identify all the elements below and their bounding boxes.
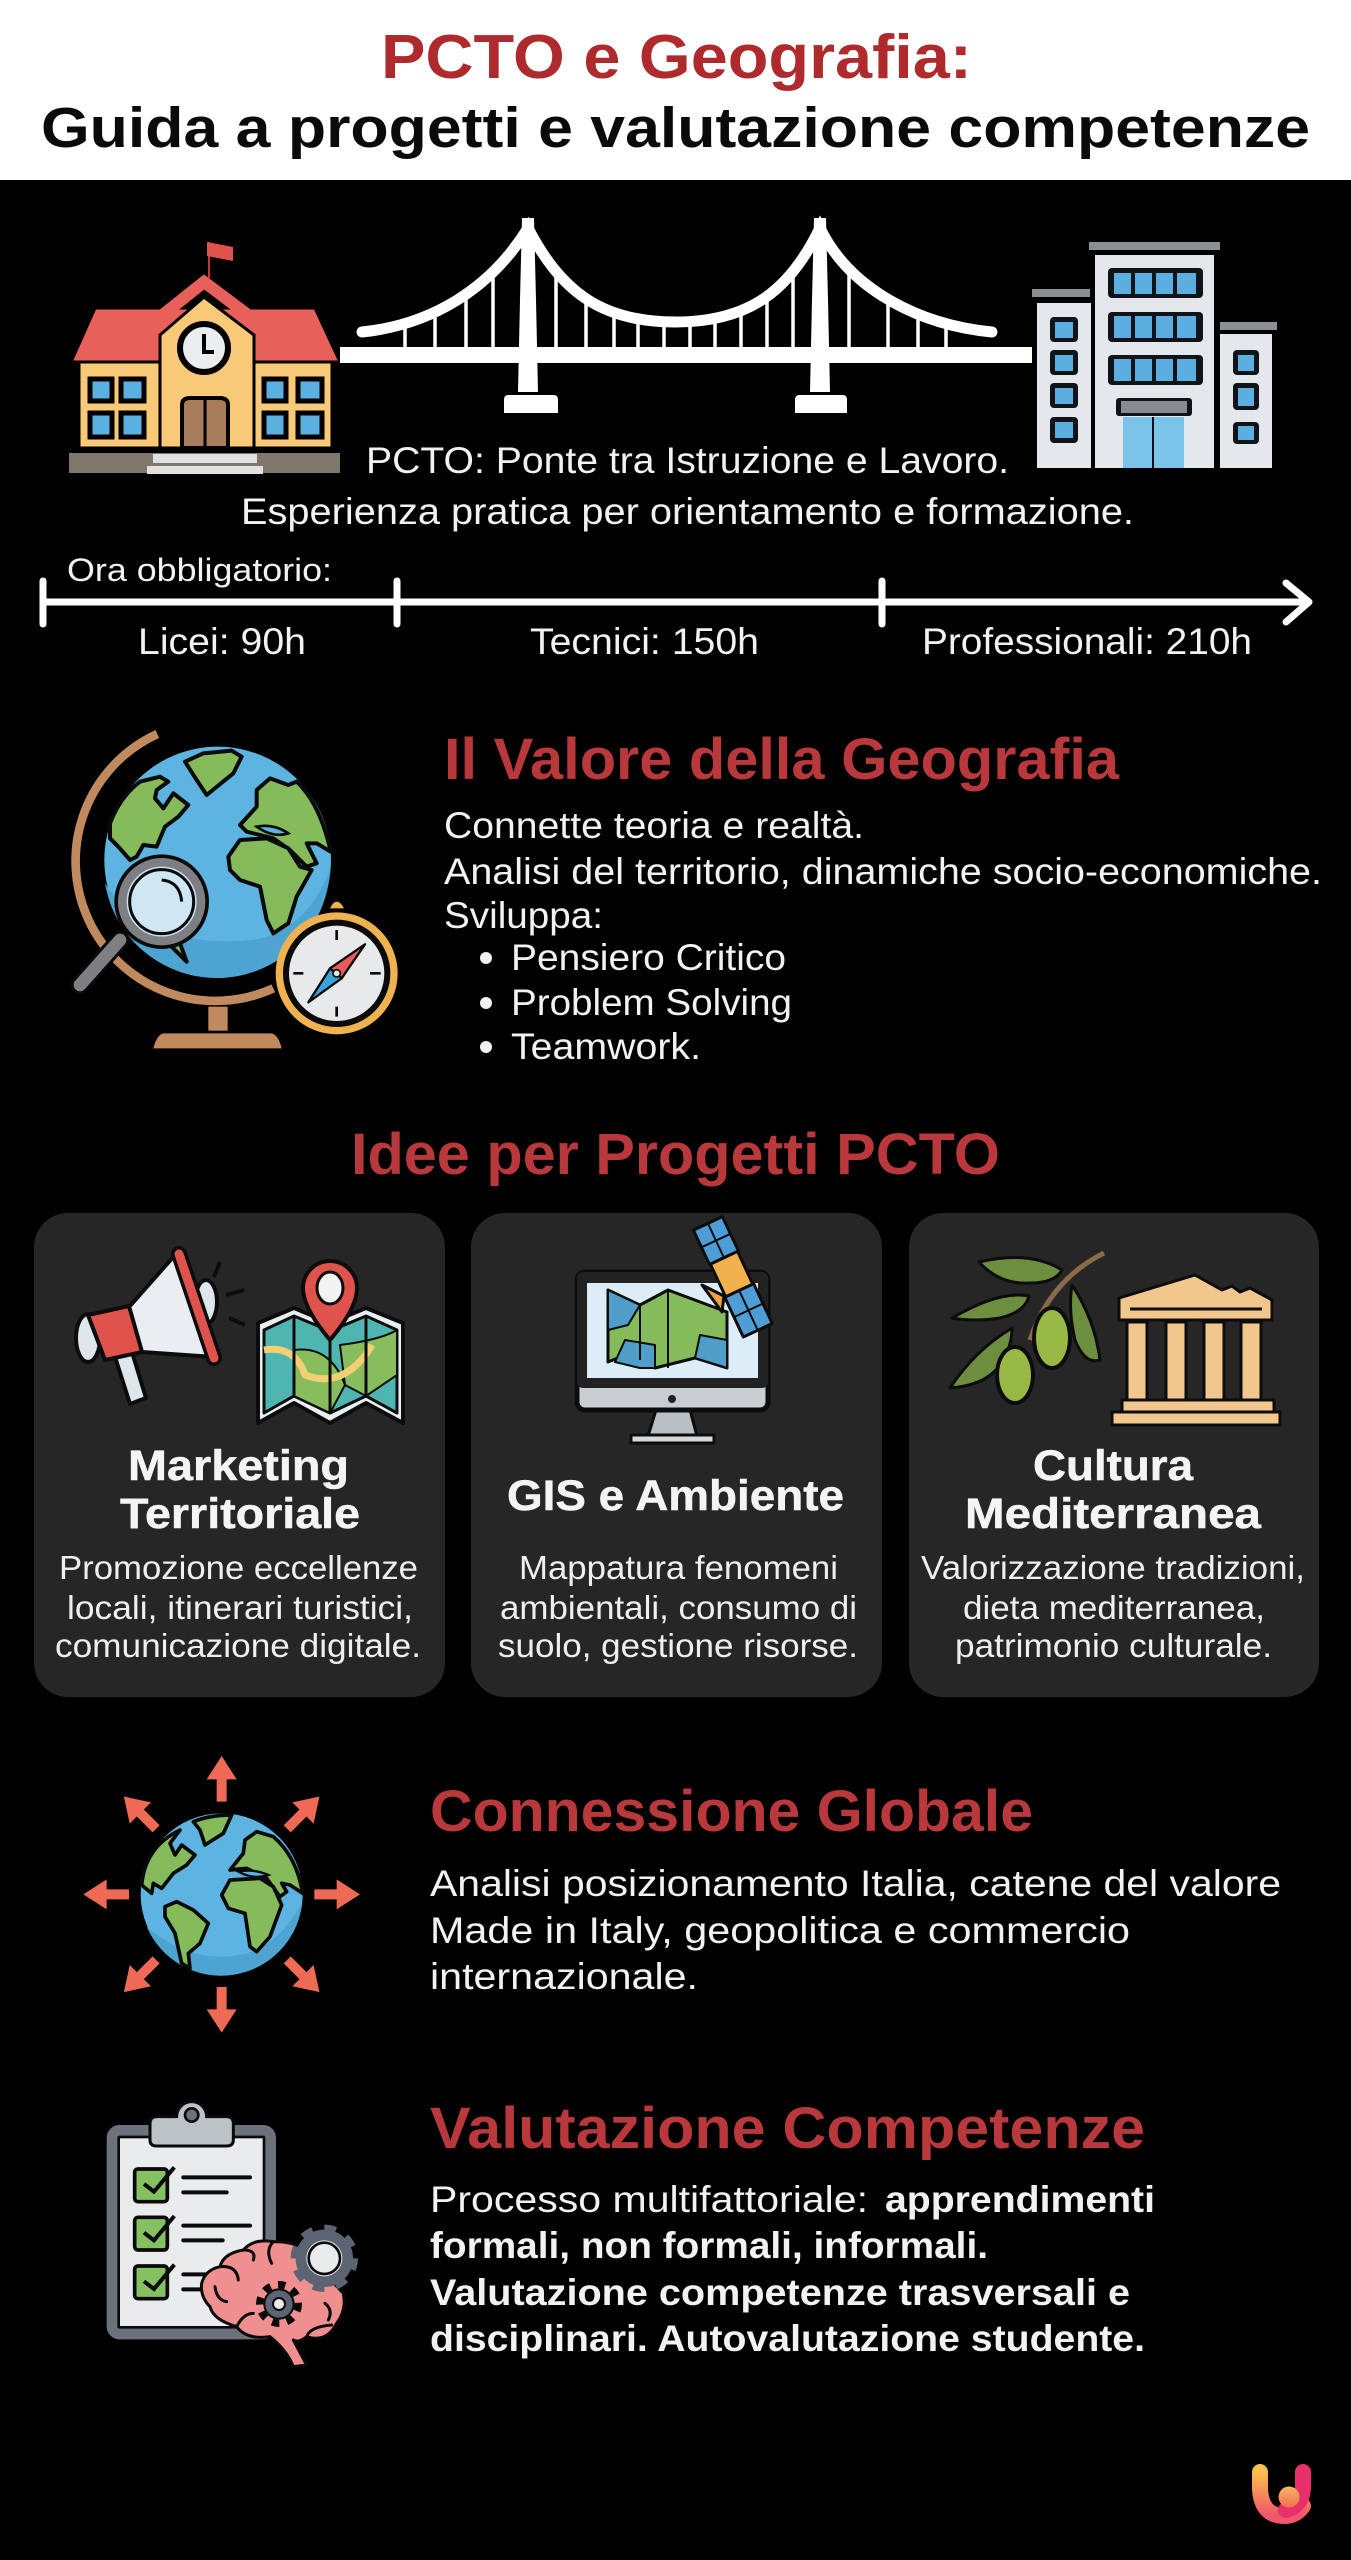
panel: Cultura Mediterranea bbox=[909, 1213, 1319, 1697]
card description: suolo, gestione risorse. bbox=[498, 1627, 858, 1664]
text block: competence assessment: apprendimenti bbox=[885, 2179, 1155, 2220]
timeline: mandatory hours: Professionali: 210h bbox=[922, 621, 1252, 662]
card title: GIS e Ambiente bbox=[507, 1472, 844, 1520]
timeline: mandatory hours: Ora obbligatorio: bbox=[67, 552, 332, 588]
heading: Connessione Globale: Connessione Globale bbox=[430, 1779, 1033, 1844]
text block: geography value: Pensiero Critico bbox=[511, 937, 786, 978]
timeline: mandatory hours: Tecnici: 150h bbox=[530, 621, 759, 662]
icon: suspension bridge bbox=[340, 218, 1032, 413]
text block: geography value: Analisi del territorio, dinamiche socio-economiche. bbox=[444, 851, 1322, 892]
card description bbox=[55, 1549, 421, 1664]
icon: greek temple bbox=[1112, 1275, 1280, 1425]
text block: geography value: Connette teoria e realtà. bbox=[444, 805, 864, 846]
icon: globe with magnifier and compass bbox=[76, 734, 394, 1048]
card title: Marketing bbox=[128, 1442, 349, 1490]
card description bbox=[498, 1549, 858, 1664]
card description bbox=[921, 1549, 1305, 1664]
text block: global connection: Analisi posizionamento Italia, catene del valore bbox=[430, 1863, 1281, 1904]
card description: ambientali, consumo di bbox=[500, 1589, 857, 1626]
icon: megaphone bbox=[76, 1254, 245, 1404]
card title: Cultura bbox=[1033, 1442, 1194, 1490]
intro text: Esperienza pratica per orientamento e formazione. bbox=[241, 491, 1134, 532]
header: title: PCTO e Geografia: bbox=[381, 23, 972, 92]
intro text: PCTO: Ponte tra Istruzione e Lavoro. bbox=[366, 440, 1009, 481]
icon: olive branch bbox=[950, 1253, 1104, 1403]
text block: global connection: internazionale. bbox=[430, 1956, 698, 1997]
icon: globe with arrows bbox=[83, 1756, 360, 2033]
text block: competence assessment: formali, non formali, informali. bbox=[430, 2225, 988, 2266]
text block: geography value: Teamwork. bbox=[511, 1026, 701, 1067]
text block: geography value bbox=[444, 805, 1322, 1067]
card description: comunicazione digitale. bbox=[55, 1627, 421, 1664]
text block: geography value: Problem Solving bbox=[511, 982, 792, 1023]
header: title bbox=[0, 0, 1351, 180]
text block: competence assessment: Valutazione competenze trasversali e bbox=[430, 2272, 1130, 2313]
panel: Marketing Territoriale: Territoriale bbox=[120, 1490, 360, 1538]
timeline: mandatory hours bbox=[43, 552, 1309, 662]
card description: Valorizzazione tradizioni, bbox=[921, 1549, 1305, 1586]
text block: competence assessment: Processo multifattoriale: bbox=[430, 2179, 868, 2220]
text block: geography value: Sviluppa: bbox=[444, 895, 603, 936]
card description: locali, itinerari turistici, bbox=[67, 1589, 413, 1626]
icon: logo bbox=[1260, 2472, 1303, 2516]
text block: competence assessment: disciplinari. Autovalutazione studente. bbox=[430, 2318, 1145, 2359]
heading: Idee per Progetti PCTO: Idee per Progetti PCTO bbox=[351, 1122, 1000, 1187]
card description: Promozione eccellenze bbox=[59, 1549, 418, 1586]
icon: map with pin bbox=[258, 1261, 403, 1423]
text block: competence assessment bbox=[430, 2179, 1155, 2359]
header: title: Guida a progetti e valutazione competenze bbox=[41, 96, 1310, 160]
card description: Mappatura fenomeni bbox=[519, 1549, 838, 1586]
intro text bbox=[241, 440, 1134, 532]
icon: clipboard with brain and gears bbox=[112, 2102, 354, 2367]
timeline: mandatory hours: Licei: 90h bbox=[138, 621, 306, 662]
heading: Il Valore della Geografia: Il Valore della Geografia bbox=[444, 727, 1120, 792]
card description: patrimonio culturale. bbox=[955, 1627, 1272, 1664]
panel: Marketing Territoriale bbox=[34, 1213, 445, 1697]
text block: global connection: Made in Italy, geopolitica e commercio bbox=[430, 1910, 1130, 1951]
icon: school bbox=[69, 242, 340, 474]
icon: monitor with map and satellite bbox=[577, 1217, 772, 1443]
panel: Cultura Mediterranea: Mediterranea bbox=[965, 1490, 1262, 1538]
icon: office building bbox=[1032, 242, 1277, 468]
text block: global connection bbox=[430, 1863, 1281, 1997]
panel: GIS e Ambiente bbox=[471, 1213, 882, 1697]
card description: dieta mediterranea, bbox=[963, 1589, 1265, 1626]
heading: Valutazione Competenze: Valutazione Competenze bbox=[430, 2096, 1145, 2161]
